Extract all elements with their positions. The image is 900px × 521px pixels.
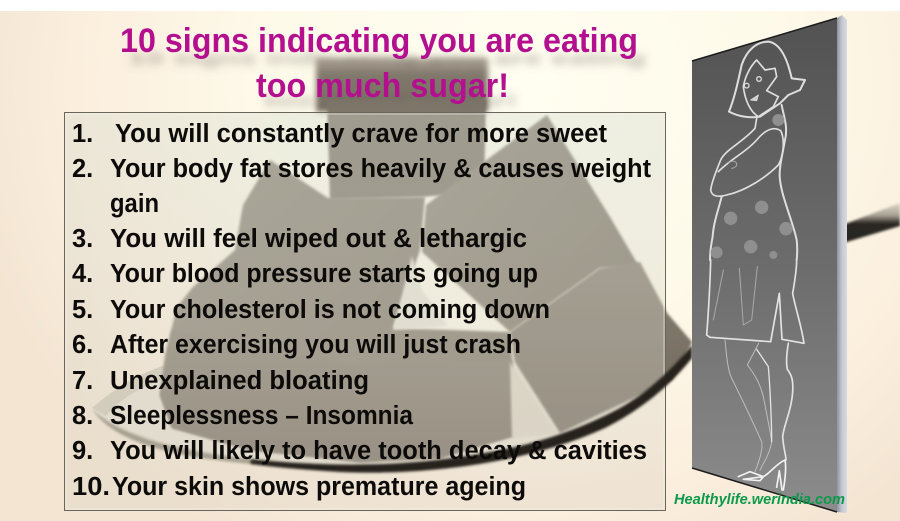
figure: skirt and legs: [707, 260, 804, 490]
sign 2: 2.: [72, 155, 93, 183]
sign 1: You will constantly crave for more sweet: [115, 120, 608, 148]
sign 7: Unexplained bloating: [110, 367, 369, 395]
title shadow: 10 signs indicating you are eating: [128, 51, 646, 68]
sign 10: Your skin shows premature ageing: [112, 473, 526, 501]
sign 6: After exercising you will just crash: [110, 331, 521, 359]
sign 1: 1.: [72, 120, 93, 148]
cube: large left mass: [160, 160, 514, 462]
sign 2: Your body fat stores heavily & causes weight: [110, 155, 651, 183]
sign 8: Sleeplessness – Insomnia: [110, 402, 414, 430]
spoon lip: [92, 362, 175, 416]
sign 2: [72, 155, 651, 218]
sign 5: 5.: [72, 296, 93, 324]
mirror shadow edges: [692, 18, 837, 512]
sign 9: 9.: [72, 437, 93, 465]
title text: 10 signs indicating you are eating: [120, 22, 638, 60]
sign 6: 6.: [72, 331, 93, 359]
sign 2: gain: [110, 190, 159, 218]
sign 3: You will feel wiped out & lethargic: [110, 225, 527, 253]
spoon rim: [92, 345, 692, 473]
title: [120, 22, 646, 110]
sign 4: 4.: [72, 260, 93, 288]
spoon dish: [92, 342, 692, 468]
title text: too much sugar!: [256, 67, 509, 105]
cube: lower left darker face: [160, 330, 514, 462]
title shadow: too much sugar!: [264, 93, 517, 110]
sugar gap wedge: [393, 256, 448, 330]
mirror with figure: [692, 15, 847, 513]
sign 8: 8.: [72, 402, 93, 430]
cube: top, blurred behind title: [316, 58, 488, 112]
photo: sugar cubes on a spoon: [92, 58, 900, 468]
sign 5: Your cholesterol is not coming down: [110, 296, 550, 324]
cube: right lower: [510, 262, 692, 433]
mirror side edge: [837, 15, 847, 513]
mirror face: [692, 18, 837, 512]
sign 3: 3.: [72, 225, 93, 253]
sign 9: You will likely to have tooth decay & cavities: [110, 437, 647, 465]
watermark: site url: Healthylife.werindia.com: [674, 492, 845, 508]
figure: dress flowers: [711, 114, 793, 259]
spoon handle: [840, 203, 900, 244]
figure: upper body outline: [710, 42, 805, 260]
cube: top, in focus: [327, 100, 486, 200]
title text: [120, 22, 638, 105]
sign 10: 10.: [72, 473, 110, 501]
sugar gap wedge lower: [510, 362, 558, 438]
sign 4: Your blood pressure starts going up: [110, 260, 538, 288]
title shadow: [128, 51, 646, 110]
cube: right top: [422, 115, 640, 332]
sign 7: 7.: [72, 367, 93, 395]
panel: list of signs: [64, 112, 692, 510]
